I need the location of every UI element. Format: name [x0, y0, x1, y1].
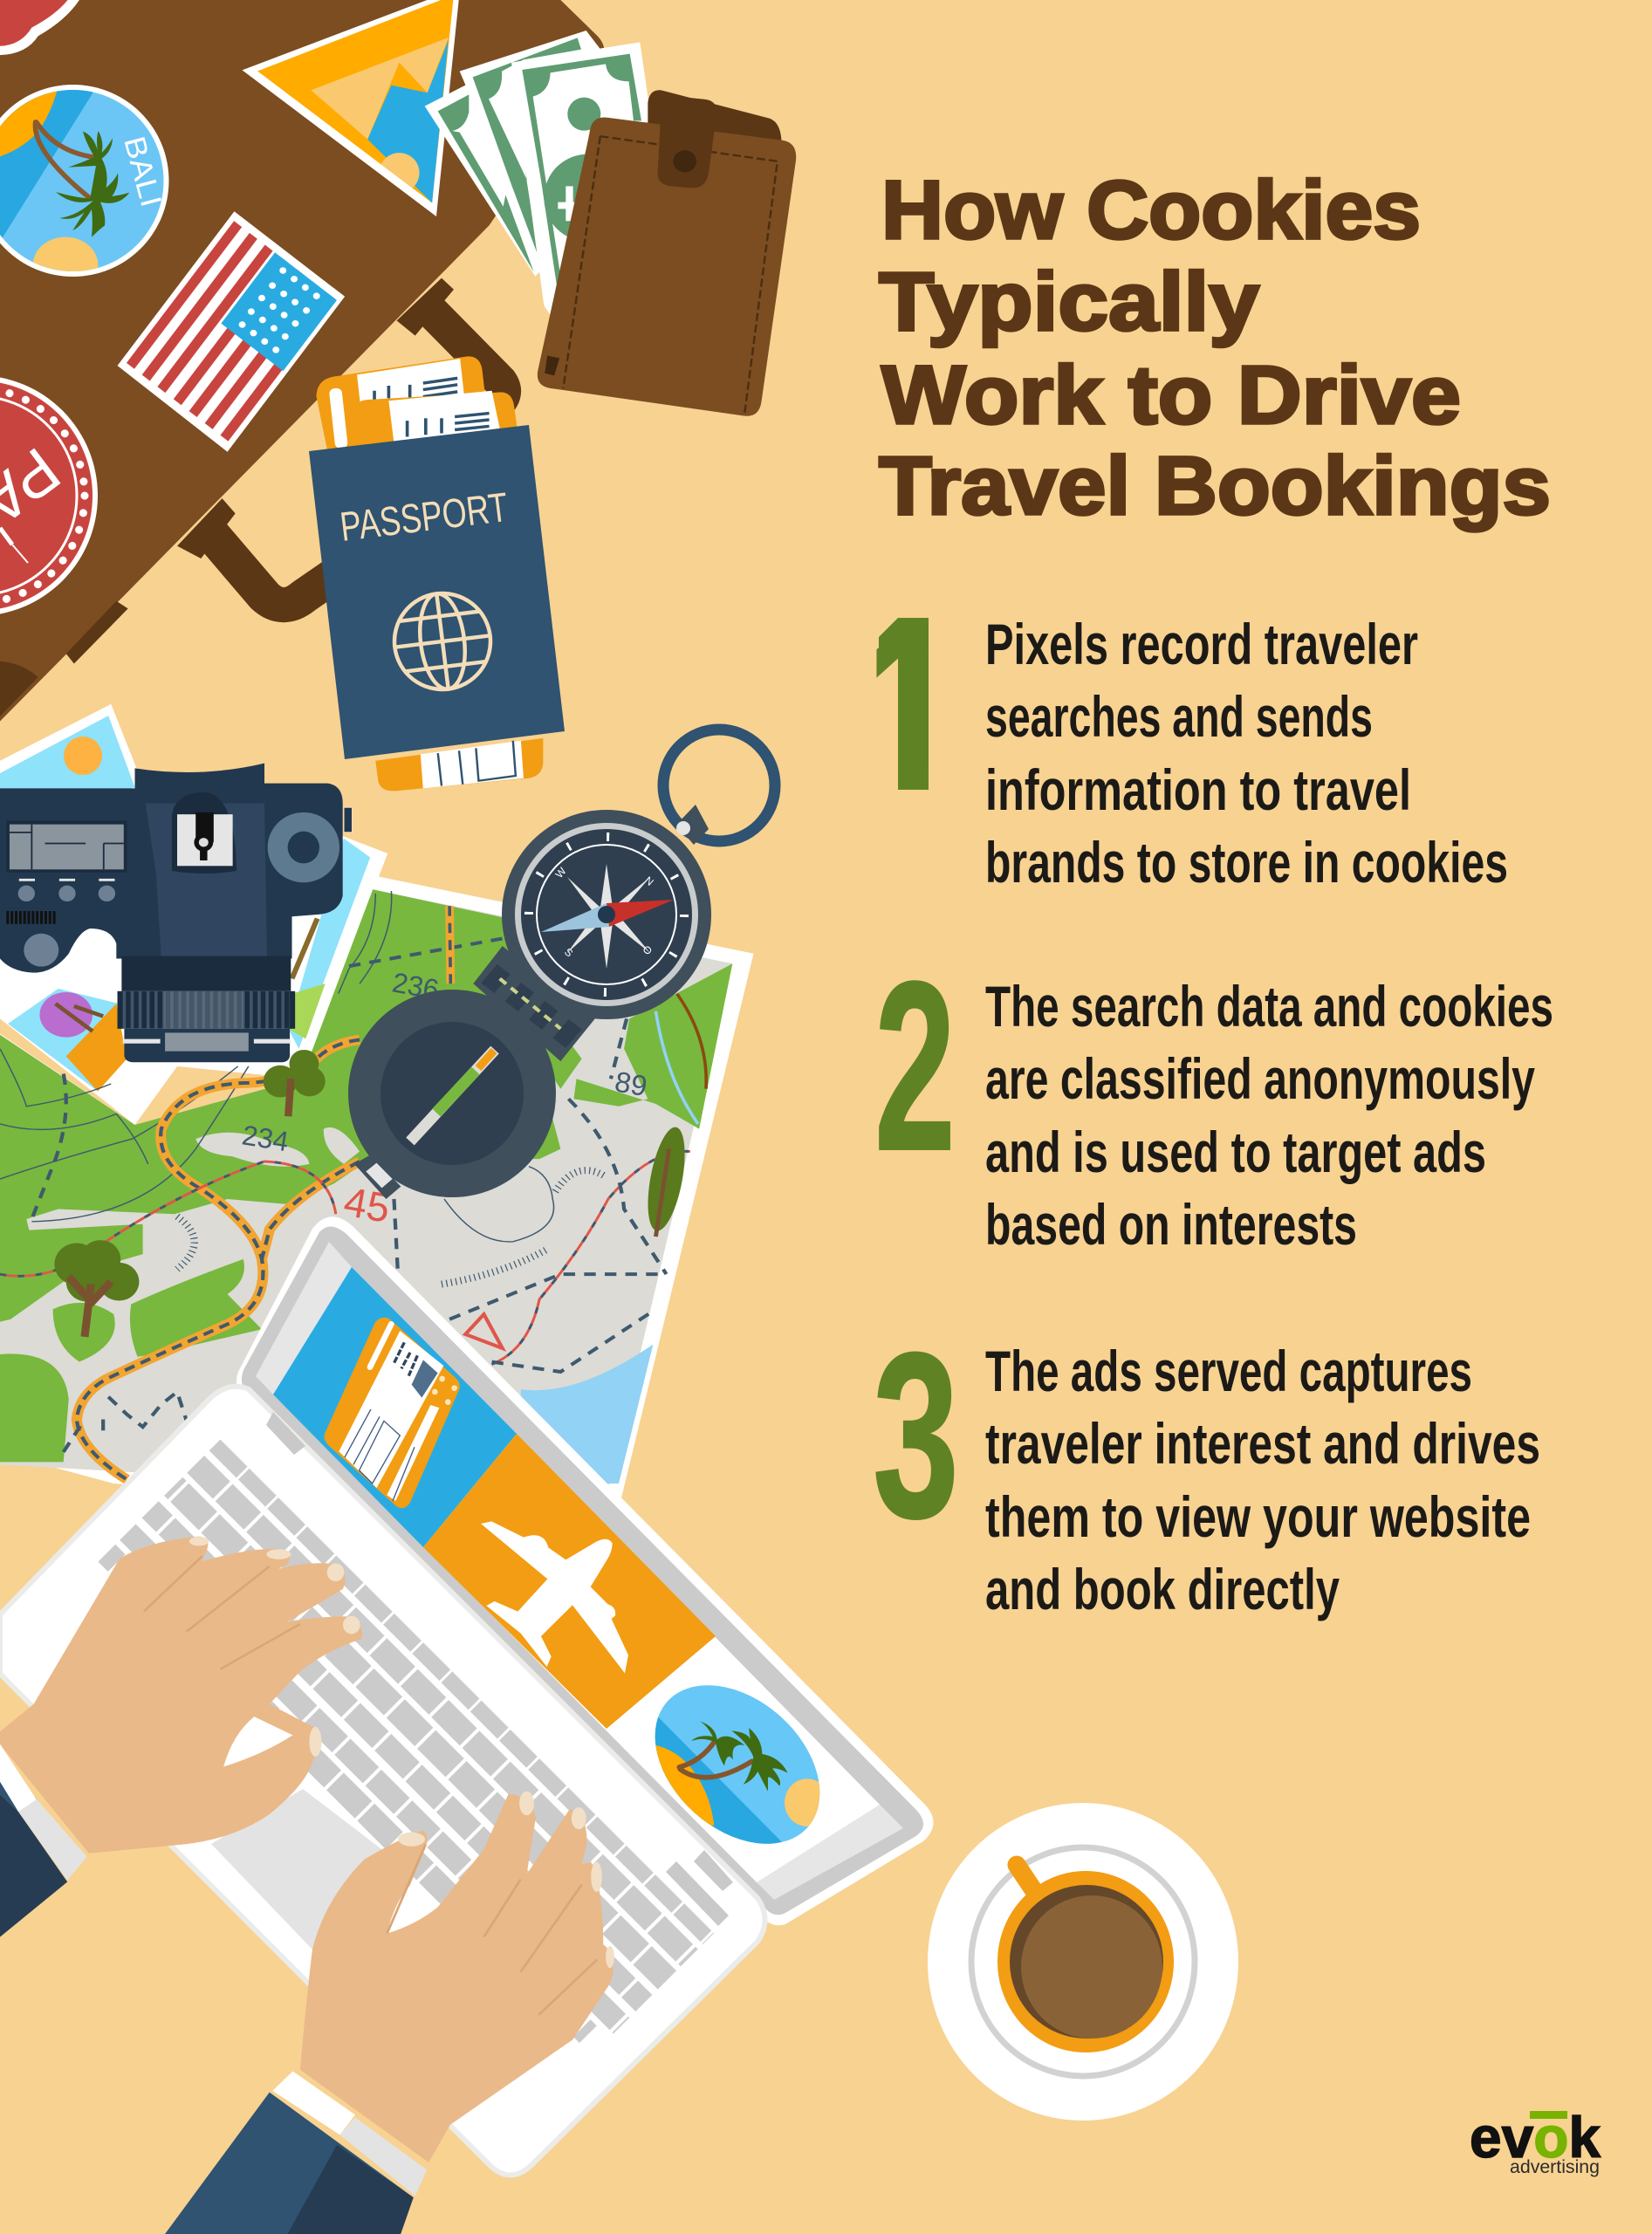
right hand — [153, 1792, 614, 2234]
step 2 — [874, 932, 1553, 1257]
compass needle — [541, 903, 609, 932]
saucer — [928, 1803, 1238, 2121]
step 1 text: searches and sends — [985, 684, 1373, 749]
passport — [309, 425, 565, 759]
wallet — [538, 90, 796, 416]
screen panel: blue ticket — [273, 1267, 517, 1547]
step 3 — [873, 1305, 1540, 1621]
laptop — [0, 1216, 934, 2175]
logo: evok advertising: evok — [1470, 2105, 1601, 2169]
laptop screen — [236, 1216, 934, 1925]
suitcase with stickers — [0, 0, 604, 722]
trail map: 45 — [340, 1178, 394, 1231]
photo sun — [64, 737, 102, 775]
title: Travel Bookings — [879, 440, 1551, 532]
left sleeve — [0, 1794, 67, 1937]
title: How Cookies — [881, 164, 1421, 257]
trail map: 236 — [390, 966, 442, 1005]
compass — [348, 730, 775, 1199]
trail map: 89 — [613, 1065, 649, 1102]
camera dial — [268, 812, 339, 882]
compass ring — [663, 730, 775, 841]
map water — [518, 1344, 653, 1484]
camera — [0, 764, 353, 1062]
dashed paths — [31, 939, 667, 1452]
compass: N — [642, 874, 656, 888]
ticket graphic — [324, 1318, 460, 1508]
suitcase handles — [177, 278, 504, 605]
coffee cup on saucer — [928, 1803, 1238, 2121]
step 2 text — [985, 974, 1553, 1257]
keyboard — [106, 1445, 709, 2046]
screen panel: island photo — [655, 1685, 820, 1844]
passport: PASSPORT — [338, 483, 511, 550]
middle bill — [460, 31, 605, 268]
money bills — [425, 31, 652, 332]
step 3 text: and book directly — [985, 1557, 1340, 1621]
compass star — [567, 864, 650, 969]
camera lcd — [6, 821, 127, 873]
sticker: red stamp — [0, 375, 98, 616]
title: Typically — [879, 256, 1259, 348]
boarding pass below passport — [375, 738, 543, 791]
red trails — [0, 1151, 690, 1364]
logo: evok advertising: advertising — [1510, 2157, 1600, 2177]
screen panel: orange with plane — [423, 1434, 716, 1729]
front bill — [511, 42, 652, 332]
hinge tabs — [266, 1412, 733, 1926]
camera hot shoe — [172, 792, 236, 874]
sticker: Bali — [0, 85, 169, 277]
cup — [997, 1871, 1174, 2052]
photo prints — [0, 704, 387, 1125]
compass: W — [553, 865, 569, 881]
right hand shape — [300, 1794, 614, 2162]
compass: S — [562, 946, 575, 959]
icon: globe — [389, 588, 496, 695]
step 3 text: The ads served captures — [985, 1339, 1472, 1403]
back bill — [425, 83, 544, 277]
suitcase body — [0, 0, 604, 722]
step 1 text — [985, 612, 1508, 894]
airline tickets — [316, 356, 518, 453]
number 2: 2 — [874, 932, 956, 1201]
title: Work to Drive — [881, 349, 1461, 442]
step 2 text: based on interests — [985, 1192, 1357, 1257]
hachures — [177, 1170, 606, 1285]
trail map — [0, 876, 754, 1519]
compass base — [348, 990, 556, 1197]
river and contours — [655, 1011, 698, 1124]
compass dial — [502, 810, 711, 1019]
camera body — [0, 764, 343, 973]
left hand shape — [0, 1536, 362, 1854]
sticker: US flag — [118, 211, 345, 452]
map elevation numbers: 234 — [240, 1119, 291, 1157]
sticker: mountain triangle — [243, 0, 460, 216]
trackpad — [211, 1789, 392, 1950]
laptop base — [0, 1387, 764, 2175]
number 1 — [876, 618, 929, 790]
compass hinge — [473, 946, 595, 1061]
compass: O — [641, 943, 655, 957]
map land — [0, 889, 732, 1499]
camera lens — [121, 956, 291, 991]
left hand — [0, 1536, 362, 1937]
step 2 text: and is used to target ads — [985, 1120, 1486, 1184]
map sheet — [0, 876, 754, 1519]
number 1: 1 — [866, 572, 959, 840]
suitcase strap — [0, 601, 128, 716]
left cuff — [0, 1744, 38, 1812]
step 1 text: information to travel — [985, 757, 1411, 822]
right sleeve — [153, 2093, 414, 2234]
sticker: Bali: BALI — [117, 133, 168, 210]
map green areas — [0, 889, 582, 1322]
cup handle — [1017, 1865, 1036, 1894]
step 1 text: Pixels record traveler — [985, 612, 1418, 676]
right cuff — [272, 2071, 355, 2135]
orange trails — [0, 906, 690, 1479]
step 1 — [876, 618, 1506, 883]
icon: plane — [481, 1521, 628, 1673]
step 3 text — [985, 1339, 1540, 1621]
tree icons — [54, 1244, 99, 1285]
title — [879, 164, 1551, 532]
number 3: 3 — [873, 1305, 959, 1567]
camera buttons — [18, 886, 35, 901]
red flower sticker — [0, 0, 79, 55]
